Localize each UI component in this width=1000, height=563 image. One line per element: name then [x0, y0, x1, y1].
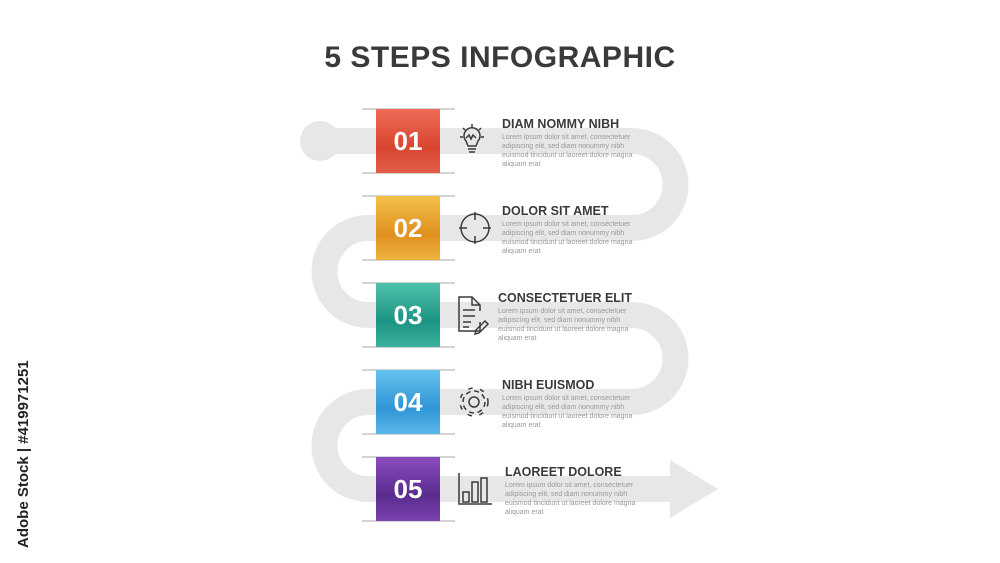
step 5: euismod tincidunt ut laoreet dolore magna	[505, 500, 635, 507]
step 4: 04	[394, 387, 423, 417]
step 1: aliquam erat	[502, 161, 541, 168]
step 5	[362, 457, 635, 521]
side watermark text: Adobe Stock | #419971251	[15, 360, 32, 548]
step 1: Lorem ipsum dolor sit amet, consectetuer	[502, 134, 631, 141]
icon: bulb	[460, 124, 484, 152]
title: 5 STEPS INFOGRAPHIC	[324, 41, 676, 74]
icon: document	[459, 297, 488, 334]
step 5: Lorem ipsum dolor sit amet, consectetuer	[505, 482, 634, 489]
step 4: NIBH EUISMOD	[502, 378, 594, 392]
step 2: euismod tincidunt ut laoreet dolore magna	[502, 239, 632, 246]
step 3: aliquam erat	[498, 335, 537, 342]
step 4: Lorem ipsum dolor sit amet, consectetuer	[502, 395, 631, 402]
step 1: DIAM NOMMY NIBH	[502, 117, 619, 131]
step 1: adipiscing elit, sed diam nonummy nibh	[502, 143, 624, 150]
step 2: aliquam erat	[502, 248, 541, 255]
step 2: adipiscing elit, sed diam nonummy nibh	[502, 230, 624, 237]
step 2: 02	[394, 213, 422, 243]
step 2	[362, 196, 632, 260]
step 3	[362, 283, 632, 347]
step 5: LAOREET DOLORE	[505, 465, 622, 479]
step 4: adipiscing elit, sed diam nonummy nibh	[502, 404, 624, 411]
icon: target	[459, 212, 491, 244]
icon: bar chart	[459, 473, 492, 504]
step 5: aliquam erat	[505, 509, 544, 516]
step 2: Lorem ipsum dolor sit amet, consectetuer	[502, 221, 631, 228]
step 4: aliquam erat	[502, 422, 541, 429]
step 3: 03	[394, 300, 422, 330]
step 5: adipiscing elit, sed diam nonummy nibh	[505, 491, 627, 498]
step 3: CONSECTETUER ELIT	[498, 291, 632, 305]
winding path	[300, 121, 718, 518]
step 3: euismod tincidunt ut laoreet dolore magna	[498, 326, 628, 333]
step 1	[362, 109, 632, 173]
step 4	[362, 370, 632, 434]
step 3: adipiscing elit, sed diam nonummy nibh	[498, 317, 620, 324]
step 1: euismod tincidunt ut laoreet dolore magna	[502, 152, 632, 159]
step 4: euismod tincidunt ut laoreet dolore magna	[502, 413, 632, 420]
icon: gear	[460, 388, 488, 416]
step 2: DOLOR SIT AMET	[502, 204, 609, 218]
step 1: 01	[394, 126, 422, 156]
step 3: Lorem ipsum dolor sit amet, consectetuer	[498, 308, 627, 315]
step 5: 05	[394, 474, 422, 504]
